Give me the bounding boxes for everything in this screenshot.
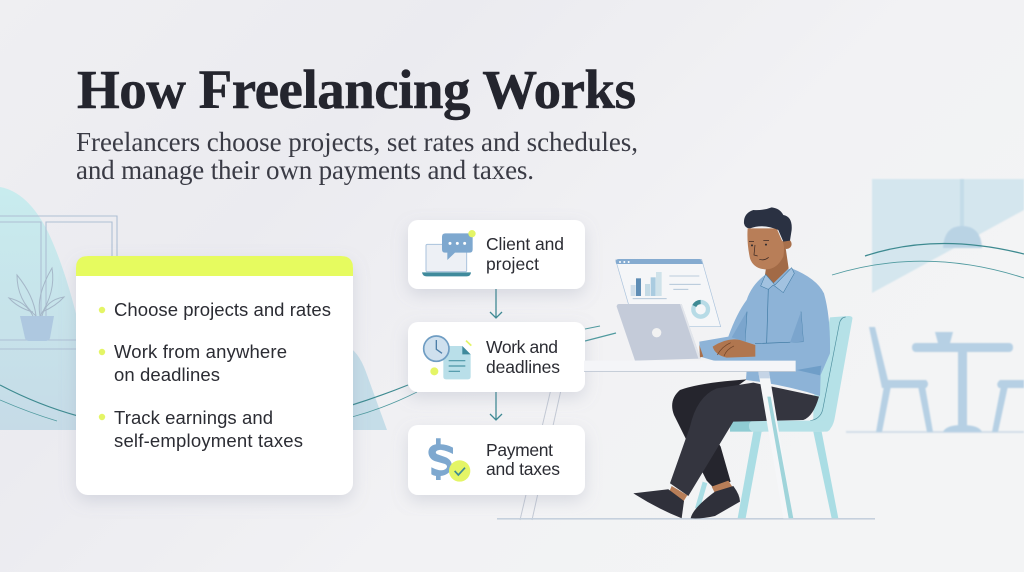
icon: clock and document xyxy=(424,336,471,379)
flow card: work and deadlines xyxy=(408,322,585,392)
bullet: work from anywhere: Work from anywhere xyxy=(114,341,287,362)
bullet: choose projects: Choose projects and rates xyxy=(114,299,331,320)
icon: dollar sign with check xyxy=(428,438,470,482)
flow card: payment and taxes: and taxes xyxy=(486,459,560,479)
icon: laptop with chat bubble xyxy=(422,230,476,276)
floating dashboard window xyxy=(616,259,721,327)
flow card: client and project xyxy=(408,220,585,289)
chair xyxy=(695,316,852,518)
flow card: work and deadlines: deadlines xyxy=(486,357,560,377)
background: connecting curved lines xyxy=(0,243,1024,520)
laptop xyxy=(617,304,701,361)
bullet: track earnings: self-employment taxes xyxy=(114,430,303,451)
flow card: payment and taxes xyxy=(408,425,585,495)
background: left teal mound with window and plant xyxy=(0,187,387,430)
hands xyxy=(699,339,755,358)
ground line xyxy=(497,518,875,520)
flow card: work and deadlines: Work and xyxy=(486,337,558,357)
subtitle xyxy=(76,127,638,185)
near leg and shoe xyxy=(633,383,819,518)
shirt xyxy=(699,268,830,396)
subtitle: and manage their own payments and taxes. xyxy=(76,155,534,185)
arrow: work to payment xyxy=(490,392,502,420)
bullet: track earnings xyxy=(99,407,303,451)
background: cafe scene on the right xyxy=(846,179,1024,433)
panel header band xyxy=(76,256,353,276)
flow card: client and project: project xyxy=(486,254,539,274)
bullet: track earnings: Track earnings and xyxy=(114,407,273,428)
far leg and shoe xyxy=(672,379,747,519)
flow card: client and project: Client and xyxy=(486,234,564,254)
illustration: freelancer at desk xyxy=(584,207,852,519)
arrow: client to work xyxy=(490,289,502,318)
desk xyxy=(584,361,796,518)
flow card: payment and taxes: Payment xyxy=(486,440,553,460)
panel: key points xyxy=(76,256,353,495)
bullet: work from anywhere: on deadlines xyxy=(114,364,220,385)
bullet: work from anywhere xyxy=(99,341,287,385)
subtitle: Freelancers choose projects, set rates and schedules, xyxy=(76,127,638,157)
title: How Freelancing Works xyxy=(77,59,636,120)
head xyxy=(744,207,794,293)
